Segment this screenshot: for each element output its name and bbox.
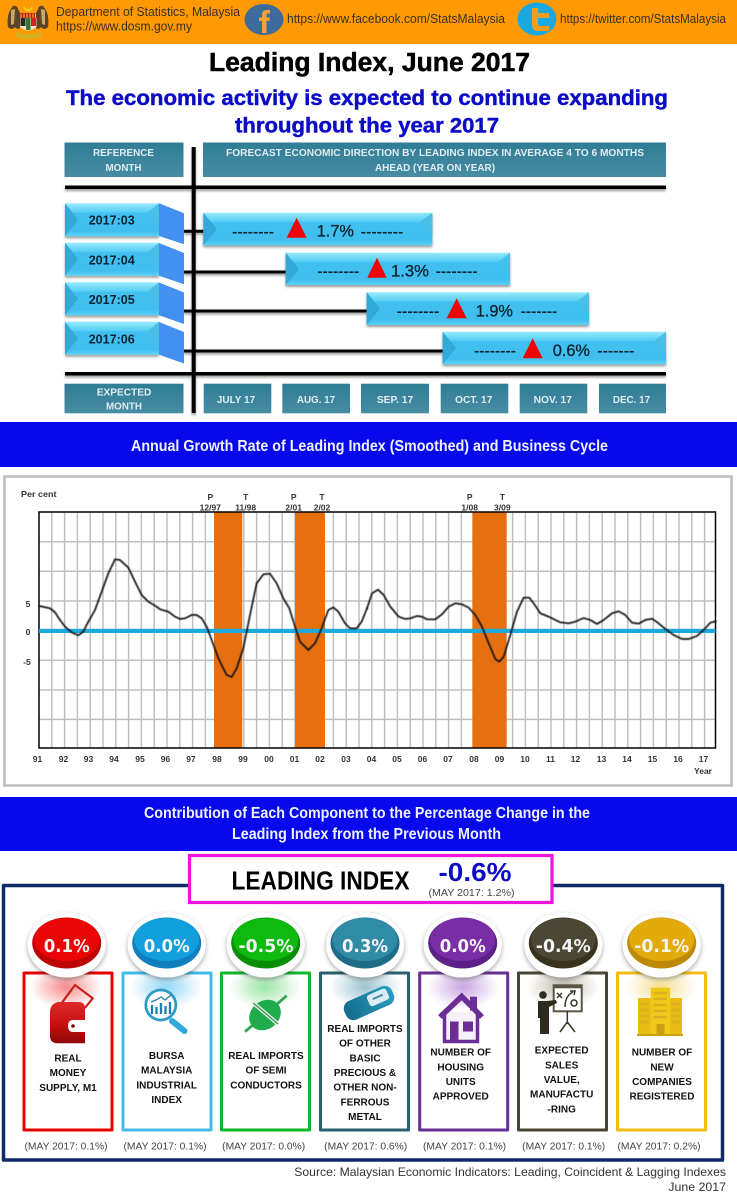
heading: reference month: MONTH [106,162,142,174]
badge: 0.0%: 0.0% [144,936,190,957]
forecast bar: 1.3%: 1.3% [391,263,429,281]
x axis labels: 12 [571,754,580,764]
row: 2017:04: 2017:04 [89,252,135,268]
row: 2017:06 [65,322,184,364]
label: NUMBER OF [430,1048,491,1059]
month axis: JULY 17 [217,394,255,406]
cycle labels: T [319,492,325,502]
badge: 0.0% [128,912,206,978]
x axis labels: 07 [443,754,453,764]
label: PRECIOUS & [334,1068,396,1079]
previous month: (MAY 2017: 0.1%) [522,1142,605,1152]
label: FERROUS [341,1097,390,1108]
label: OF OTHER [339,1039,392,1050]
x axis labels: 93 [84,754,93,764]
axis label: per cent: Per cent [21,489,57,499]
forecast bar: 1.7% [203,213,432,245]
label: METAL [348,1112,382,1123]
label: BASIC [349,1053,381,1064]
label [430,1048,491,1103]
source note [294,1165,726,1194]
callout: leading index: (MAY 2017: 1.2%) [428,888,514,899]
x axis labels: 94 [109,754,119,764]
banner: annual growth heading [0,422,737,467]
label: BURSA [149,1051,184,1062]
cycle labels: 1/08 [461,502,478,512]
x axis labels: 02 [315,754,325,764]
cycle labels: 2/01 [285,502,302,512]
label: SUPPLY, M1 [39,1083,97,1094]
label: CONDUCTORS [230,1080,302,1091]
y axis labels: 5 [26,599,31,609]
forecast bar: 1.9%: 1.9% [476,303,513,321]
card: new companies [618,912,706,1152]
x axis labels: 99 [238,754,248,764]
icon: house [440,996,482,1042]
card: real money supply [24,912,112,1152]
x axis labels: 06 [418,754,427,764]
month axis: OCT. 17 [455,394,493,406]
label: -RING [548,1104,576,1115]
label: OF SEMI [245,1066,287,1077]
x axis labels: 91 [33,754,42,764]
forecast bar: 0.6% [443,332,666,364]
previous month: (MAY 2017: 0.0%) [222,1142,305,1152]
heading: forecast direction [203,142,666,177]
row: 2017:06: 2017:06 [89,332,135,346]
badge: -0.5% [227,912,305,978]
x axis labels: 04 [367,754,376,764]
x axis labels: 98 [212,754,222,764]
label: HOUSING [437,1062,484,1073]
x axis labels: 96 [161,754,170,764]
icon: twitter [518,2,556,36]
month axis: SEP. 17 [377,394,413,406]
previous month: (MAY 2017: 0.1%) [124,1142,206,1152]
icon: metal bar [341,983,397,1023]
icon: semiconductor [243,993,287,1037]
label: SALES [545,1060,579,1071]
label [530,1046,593,1115]
cycle labels: 11/98 [235,502,256,512]
icon: buildings [637,988,683,1036]
x axis labels: 13 [597,754,606,764]
y axis labels: 0 [26,627,31,637]
cycle labels: P [207,492,213,502]
x axis labels: 92 [59,754,68,764]
row: 2017:03: 2017:03 [89,212,135,228]
badge: 0.0%: 0.0% [440,936,486,957]
y axis labels [23,599,31,667]
banner: contribution heading: Leading Index from the Previous Month [232,826,501,843]
label: OTHER NON- [333,1083,397,1094]
label: VALUE, [544,1075,580,1086]
row: 2017:03 [65,203,184,244]
x axis labels: 11 [546,754,555,764]
badge: -0.5%: -0.5% [238,936,294,957]
title: Leading Index, June 2017 [209,49,530,77]
source note: Source: Malaysian Economic Indicators: Leading, Coincident & Lagging Indexes [294,1165,726,1179]
month axis: DEC. 17 [613,394,650,406]
banner: contribution heading [0,797,737,851]
cycle labels [200,492,511,512]
forecast bar: 1.7%: -------- [361,224,403,239]
x axis labels: Year [694,766,713,776]
card: other metals [320,912,408,1152]
x axis labels [33,754,713,776]
label: MANUFACTU [530,1090,593,1101]
label: COMPANIES [632,1077,692,1088]
x axis labels: 00 [264,754,274,764]
label: MALAYSIA [141,1066,192,1077]
forecast bar: 1.7%: -------- [232,224,274,239]
previous month: (MAY 2017: 0.1%) [423,1142,506,1152]
header text: department [56,5,240,34]
panel: component frame [4,886,722,1160]
forecast bar: 1.3% [286,253,510,285]
label: UNITS [446,1077,476,1088]
badge: 0.3%: 0.3% [342,936,388,957]
cycle labels: 2/02 [314,502,331,512]
x axis labels: 14 [622,754,632,764]
header bar [0,0,737,44]
badge: -0.4% [524,912,602,978]
x axis labels: 15 [648,754,657,764]
heading: reference month [64,142,184,177]
subtitle [66,87,668,138]
x axis labels: 03 [341,754,351,764]
label: INDEX [151,1095,182,1106]
source note: June 2017 [668,1180,726,1194]
y axis labels: -5 [23,657,31,667]
month axis: NOV. 17 [534,394,572,406]
x axis labels: 97 [186,754,196,764]
forecast bar: 1.9% [367,292,589,325]
previous month: (MAY 2017: 0.6%) [324,1142,407,1152]
x axis labels: 09 [495,754,504,764]
callout: leading index: -0.6% [438,857,512,887]
row: 2017:05: 2017:05 [89,292,135,307]
forecast bar: 1.9%: -------- [397,304,439,319]
month axis [204,384,666,413]
cycle labels: P [291,492,297,502]
badge: 0.1% [28,912,106,978]
label [629,1048,695,1103]
card: bursa malaysia [123,912,211,1152]
heading: expected month [64,384,184,413]
badge: -0.1%: -0.1% [634,936,689,957]
subtitle: The economic activity is expected to continue expanding [66,87,668,110]
heading: reference month: REFERENCE [93,147,154,159]
forecast bar: 1.7%: 1.7% [317,223,354,241]
forecast bar: 1.3%: -------- [436,264,478,279]
label: REAL [54,1054,82,1064]
badge: 0.0% [424,912,502,978]
badge: -0.1% [623,912,701,978]
x axis labels: 01 [290,754,299,764]
label: EXPECTED [535,1046,589,1057]
panel: line chart [4,476,732,786]
zero line [39,629,716,633]
label: REGISTERED [629,1092,695,1103]
month axis: AUG. 17 [297,394,335,406]
banner: contribution heading: Contribution of Each Component to the Percentage Change in the [144,805,590,822]
x axis labels: 08 [469,754,479,764]
heading: expected month: MONTH [106,400,142,412]
heading: forecast direction: FORECAST ECONOMIC DIRECTION BY LEADING INDEX IN AVERAGE 4 TO 6 MONTHS [226,147,644,159]
badge: 0.1%: 0.1% [44,936,90,957]
cycle labels: 3/09 [494,502,511,512]
icon: wallet [50,985,93,1043]
label [327,1024,403,1123]
badge: 0.3% [326,912,404,978]
card: housing units [420,912,508,1152]
previous month: (MAY 2017: 0.2%) [618,1142,700,1152]
heading: forecast direction: AHEAD (YEAR ON YEAR) [375,162,495,174]
label [228,1051,304,1091]
icon: facebook [244,4,284,35]
forecast bar: 0.6%: 0.6% [553,342,590,360]
cycle labels: P [467,492,473,502]
icon: presenter and board [538,985,582,1034]
subtitle: throughout the year 2017 [235,114,499,138]
x axis labels: 17 [699,754,708,764]
forecast bar: 1.3%: -------- [317,264,359,279]
banner: annual growth heading: Annual Growth Rate of Leading Index (Smoothed) and Business Cycle [131,438,608,455]
twitter link: https://twitter.com/StatsMalaysia [560,12,726,26]
icon: national crest [8,5,48,39]
row: 2017:04 [65,243,184,284]
previous month: (MAY 2017: 0.1%) [24,1142,108,1152]
row: 2017:05 [65,282,184,324]
facebook link: https://www.facebook.com/StatsMalaysia [287,12,505,26]
label: MONEY [50,1068,87,1079]
label [136,1051,197,1106]
cycle labels: T [500,492,506,502]
label: NUMBER OF [632,1048,692,1059]
badge: -0.4%: -0.4% [536,936,591,957]
icon: magnifier chart [146,990,184,1031]
label: REAL IMPORTS [228,1051,304,1062]
cycle labels: T [243,492,249,502]
forecast bar: 0.6%: ------- [597,343,634,358]
heading: expected month: EXPECTED [97,386,152,398]
label: APPROVED [433,1092,489,1103]
panel: forecast timeline [64,142,666,413]
callout: leading index [190,856,552,902]
x axis labels: 10 [520,754,530,764]
forecast bar: 1.9%: ------- [521,304,557,319]
card: expected sales [518,912,606,1152]
x axis labels: 95 [135,754,145,764]
cycle labels: 12/97 [200,502,221,512]
callout: leading index: LEADING INDEX [232,866,410,896]
recession bands [214,512,507,748]
leading index curve [39,559,716,677]
label: REAL IMPORTS [327,1024,403,1035]
header text: department: Department of Statistics, Malaysia [56,5,240,19]
label [39,1054,97,1094]
forecast bar: 0.6%: -------- [474,343,516,358]
header text: department: https://www.dosm.gov.my [56,20,193,34]
label: INDUSTRIAL [136,1080,197,1091]
label: NEW [650,1062,674,1073]
card: semiconductors [222,912,310,1152]
x axis labels: 05 [392,754,402,764]
x axis labels: 16 [673,754,683,764]
